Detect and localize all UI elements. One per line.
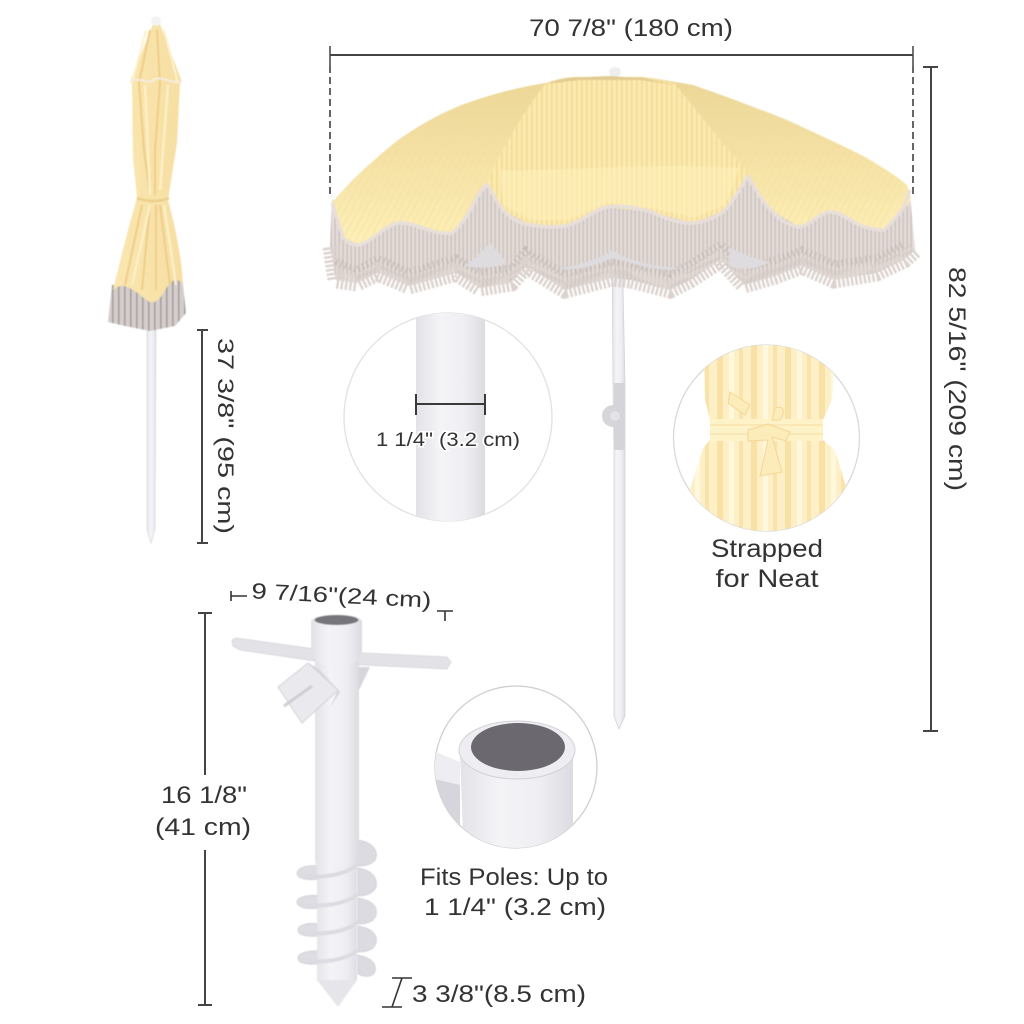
centre panel highlight bbox=[500, 166, 740, 220]
anchor height dimension: 16 1/8 in: 16 1/8" bbox=[161, 782, 247, 809]
closed length dimension: 37 3/8 in bbox=[197, 330, 238, 543]
width dimension: 70 7/8 in: 70 7/8" (180 cm) bbox=[529, 15, 733, 42]
closed scallop trim bbox=[130, 78, 182, 82]
closed length dimension: 37 3/8 in: 37 3/8" (95 cm) bbox=[213, 338, 238, 534]
ground anchor bbox=[232, 614, 451, 1007]
detail circle: anchor cup bbox=[430, 686, 597, 860]
closed pole bbox=[147, 325, 156, 543]
bow knot bbox=[728, 392, 790, 476]
underside panels bbox=[465, 243, 770, 270]
strap caption bbox=[711, 535, 823, 593]
anchor height dimension: 16 1/8 in bbox=[155, 613, 251, 1005]
anchor cup bbox=[311, 614, 362, 668]
anchor width dimension: 9 7/16 in: 9 7/16"(24 cm) bbox=[251, 578, 432, 613]
fringe jagged lower edge bbox=[331, 247, 915, 290]
closed tie bbox=[137, 198, 169, 201]
fringe bbox=[330, 177, 915, 290]
anchor tip bbox=[317, 980, 357, 1007]
fringe shadow tier bbox=[336, 244, 904, 274]
anchor clamp bbox=[278, 663, 338, 723]
centre striped panel bbox=[487, 78, 748, 225]
yellow canopy side panels bbox=[332, 77, 911, 245]
closed umbrella bbox=[108, 16, 186, 543]
height dimension: 82 5/16 in: 82 5/16" (209 cm) bbox=[943, 267, 970, 491]
screw diameter dimension: 3 3/8 in bbox=[382, 978, 586, 1008]
anchor width dimension: 9 7/16 in bbox=[231, 578, 453, 621]
closed fabric bbox=[113, 24, 183, 302]
strap caption: for Neat bbox=[716, 565, 819, 593]
strap caption: Strapped bbox=[711, 535, 823, 563]
anchor handle bbox=[232, 638, 451, 669]
cup caption: Fits Poles: Up to bbox=[420, 864, 608, 891]
strapped fabric bbox=[690, 340, 850, 540]
detail circle: pole diameter bbox=[343, 312, 553, 522]
fine diagonal stripes bbox=[332, 83, 907, 245]
closed folds bbox=[125, 30, 170, 290]
anchor height dimension: 16 1/8 in: (41 cm) bbox=[155, 814, 251, 841]
height dimension: 82 5/16 in bbox=[923, 67, 970, 731]
cup caption: 1 1/4" (3.2 cm) bbox=[424, 894, 606, 921]
screw diameter dimension: 3 3/8 in: 3 3/8"(8.5 cm) bbox=[412, 981, 586, 1008]
pole width label: 1 1/4" (3.2 cm) bbox=[376, 430, 520, 451]
detail circle: strap bbox=[674, 340, 860, 540]
scalloped binding bbox=[332, 177, 910, 245]
anchor screw lobes bbox=[358, 840, 376, 976]
anchor shaft bbox=[315, 660, 359, 1007]
closed fringe bbox=[108, 275, 186, 331]
pole width marker bbox=[416, 394, 485, 415]
open umbrella pole bbox=[602, 240, 625, 729]
cup caption bbox=[420, 864, 608, 921]
open umbrella canopy bbox=[330, 67, 915, 290]
anchor screw flights bbox=[300, 864, 358, 962]
closed tip bbox=[151, 16, 161, 26]
width dimension: 70 7/8 in bbox=[330, 15, 913, 196]
cup closeup bbox=[435, 720, 576, 848]
top knob bbox=[609, 67, 621, 77]
pole closeup bbox=[416, 313, 485, 521]
